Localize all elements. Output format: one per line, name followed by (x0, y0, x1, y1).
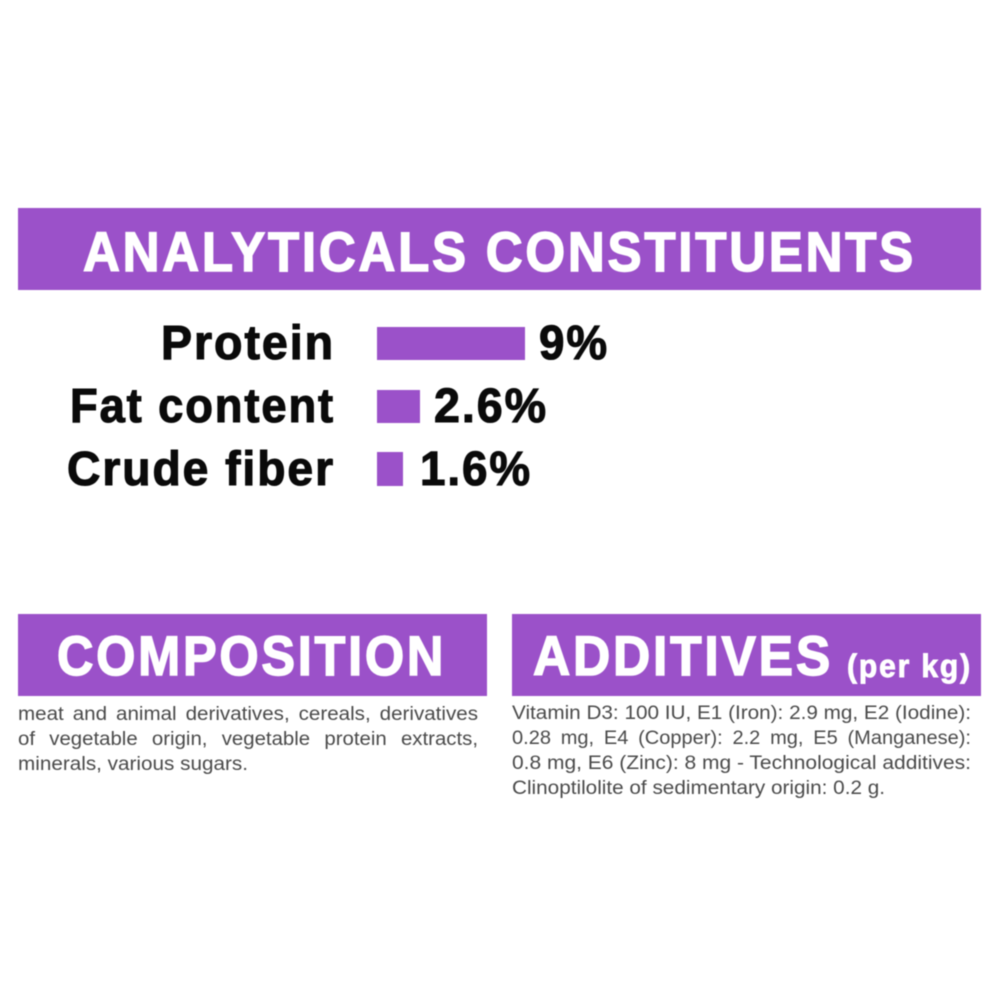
panel: additives header: ADDITIVES (533, 624, 833, 687)
text block: composition: meat and animal derivatives, cereals, derivatives (18, 704, 478, 725)
row: crude fiber: 1.6% (420, 443, 532, 496)
row: crude fiber: Crude fiber (67, 443, 335, 496)
panel: composition header: COMPOSITION (57, 624, 446, 687)
text block: composition: minerals, various sugars. (18, 754, 248, 775)
text block: composition (18, 704, 478, 775)
row: crude fiber (67, 443, 532, 496)
text block: additives: Vitamin D3: 100 IU, E1 (Iron): 2.9 mg, E2 (Iodine): (512, 703, 971, 724)
row: protein: 9% (539, 317, 609, 370)
text block: additives: Clinoptilolite of sedimentary origin: 0.2 g. (512, 778, 885, 799)
panel: additives header (512, 614, 981, 696)
text block: additives: 0.28 mg, E4 (Copper): 2.2 mg, E5 (Manganese): (512, 728, 971, 749)
panel: additives header: (per kg) (847, 648, 972, 684)
row: fat content: 2.6% (434, 380, 548, 433)
row: fat content (70, 380, 548, 433)
text block: additives: 0.8 mg, E6 (Zinc): 8 mg - Technological additives: (512, 753, 971, 774)
text block: composition: of vegetable origin, vegetable protein extracts, (18, 729, 478, 750)
row: protein: Protein (161, 317, 335, 370)
panel: analyticals constituents header (18, 208, 981, 290)
bar chart: constituents (67, 317, 609, 496)
title: ANALYTICALS CONSTITUENTS (83, 220, 916, 283)
row: protein (161, 317, 609, 370)
text block: additives (512, 703, 971, 799)
row: fat content: Fat content (70, 380, 335, 433)
